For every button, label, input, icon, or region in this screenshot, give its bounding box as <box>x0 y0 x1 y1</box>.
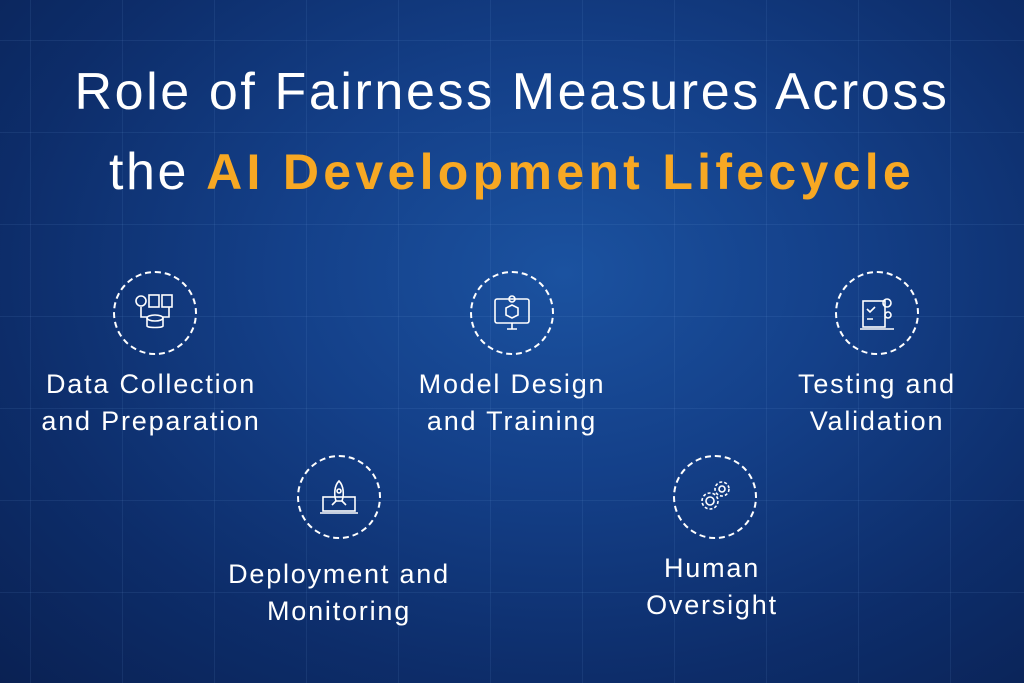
label: human oversight: Human <box>664 553 760 583</box>
label: data collection: Data Collection <box>46 369 256 399</box>
label: model design <box>419 369 605 436</box>
label: data collection <box>41 369 261 436</box>
icon: testing <box>835 271 919 355</box>
label: model design: Model Design <box>419 369 605 399</box>
label: deployment: Monitoring <box>267 596 411 626</box>
title: Role of Fairness Measures Across <box>74 63 950 121</box>
icon: human oversight <box>673 455 757 539</box>
label: data collection: and Preparation <box>41 406 261 436</box>
label: human oversight: Oversight <box>646 590 778 620</box>
icon: deployment <box>297 455 381 539</box>
title <box>74 63 950 201</box>
label: testing <box>798 369 956 436</box>
label: deployment: Deployment and <box>228 559 450 589</box>
label: human oversight <box>646 553 778 620</box>
label: model design: and Training <box>427 406 597 436</box>
icon: data collection <box>113 271 197 355</box>
label: deployment <box>228 559 450 626</box>
label: testing: Validation <box>810 406 944 436</box>
label: testing: Testing and <box>798 369 956 399</box>
title: the AI Development Lifecycle <box>109 143 915 201</box>
icon: model design <box>470 271 554 355</box>
